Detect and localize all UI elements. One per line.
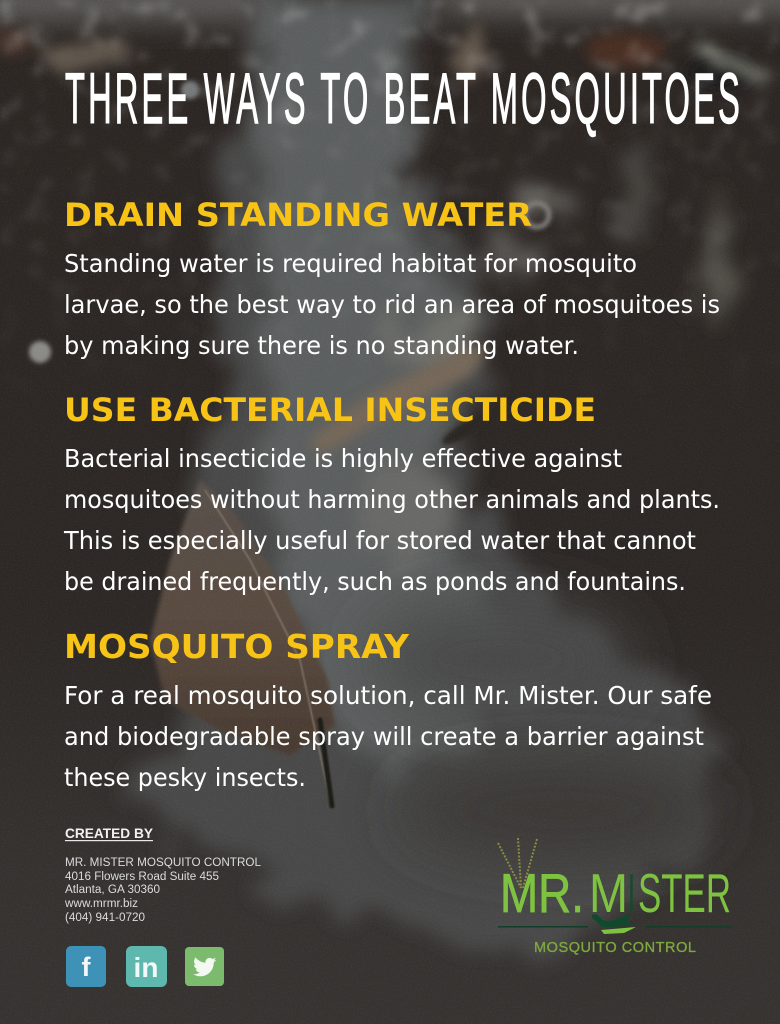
body text: mosquito spray: these pesky insects. (64, 763, 306, 792)
icon: linkedin (126, 946, 167, 987)
fallen leaf (150, 480, 335, 755)
logo wordmark: MR. (500, 862, 584, 924)
heading: use bacterial insecticide: USE BACTERIAL INSECTICIDE (64, 391, 596, 429)
body text: use bacterial insecticide: Bacterial insecticide is highly effective against (64, 444, 622, 473)
icon: spray plane (498, 914, 732, 934)
body text: mosquito spray: and biodegradable spray will create a barrier against (64, 722, 704, 751)
body text: drain standing water: larvae, so the best way to rid an area of mosquitoes is (64, 290, 720, 319)
body text: mosquito spray: For a real mosquito solution, call Mr. Mister. Our safe (64, 681, 712, 710)
created by credits (64, 825, 262, 924)
title: THREE WAYS TO BEAT MOSQUITOES (65, 59, 740, 138)
icon: facebook: f (82, 952, 92, 982)
body text: drain standing water (64, 249, 720, 360)
body text: drain standing water: by making sure there is no standing water. (64, 331, 579, 360)
section: mosquito spray (64, 627, 712, 792)
body text: drain standing water: Standing water is required habitat for mosquito (64, 249, 637, 278)
created by heading: CREATED BY (65, 825, 154, 841)
section: use bacterial insecticide (63, 391, 720, 596)
twig reflection (310, 345, 490, 455)
body text: use bacterial insecticide: mosquitoes without harming other animals and plants. (64, 485, 720, 514)
body text: use bacterial insecticide: This is especially useful for stored water that cannot (63, 526, 696, 555)
body text: mosquito spray (64, 681, 712, 792)
logo wordmark: I (628, 862, 635, 924)
icon: linkedin: in (134, 952, 158, 983)
icon: facebook (66, 946, 106, 987)
logo wordmark: M (589, 862, 628, 924)
heading: mosquito spray: MOSQUITO SPRAY (64, 627, 410, 666)
contact details: www.mrmr.biz (64, 898, 138, 910)
body text: use bacterial insecticide (63, 444, 720, 596)
icon: twitter (185, 947, 224, 986)
logo subtitle: MOSQUITO CONTROL (534, 940, 696, 956)
top edge foliage and leaves (0, 0, 260, 22)
contact details: (404) 941-0720 (65, 912, 145, 924)
body text: use bacterial insecticide: be drained frequently, such as ponds and fountains. (64, 567, 686, 596)
contact details: MR. MISTER MOSQUITO CONTROL (65, 857, 262, 869)
logo wordmark (500, 862, 731, 924)
contact details (64, 857, 262, 924)
contact details: 4016 Flowers Road Suite 455 (65, 871, 219, 883)
section: drain standing water (64, 196, 720, 360)
contact details: Atlanta, GA 30360 (65, 884, 160, 896)
heading: drain standing water: DRAIN STANDING WATER (64, 196, 532, 234)
logo: Mr. Mister Mosquito Control (498, 838, 732, 956)
icon: grass blades (498, 838, 537, 888)
